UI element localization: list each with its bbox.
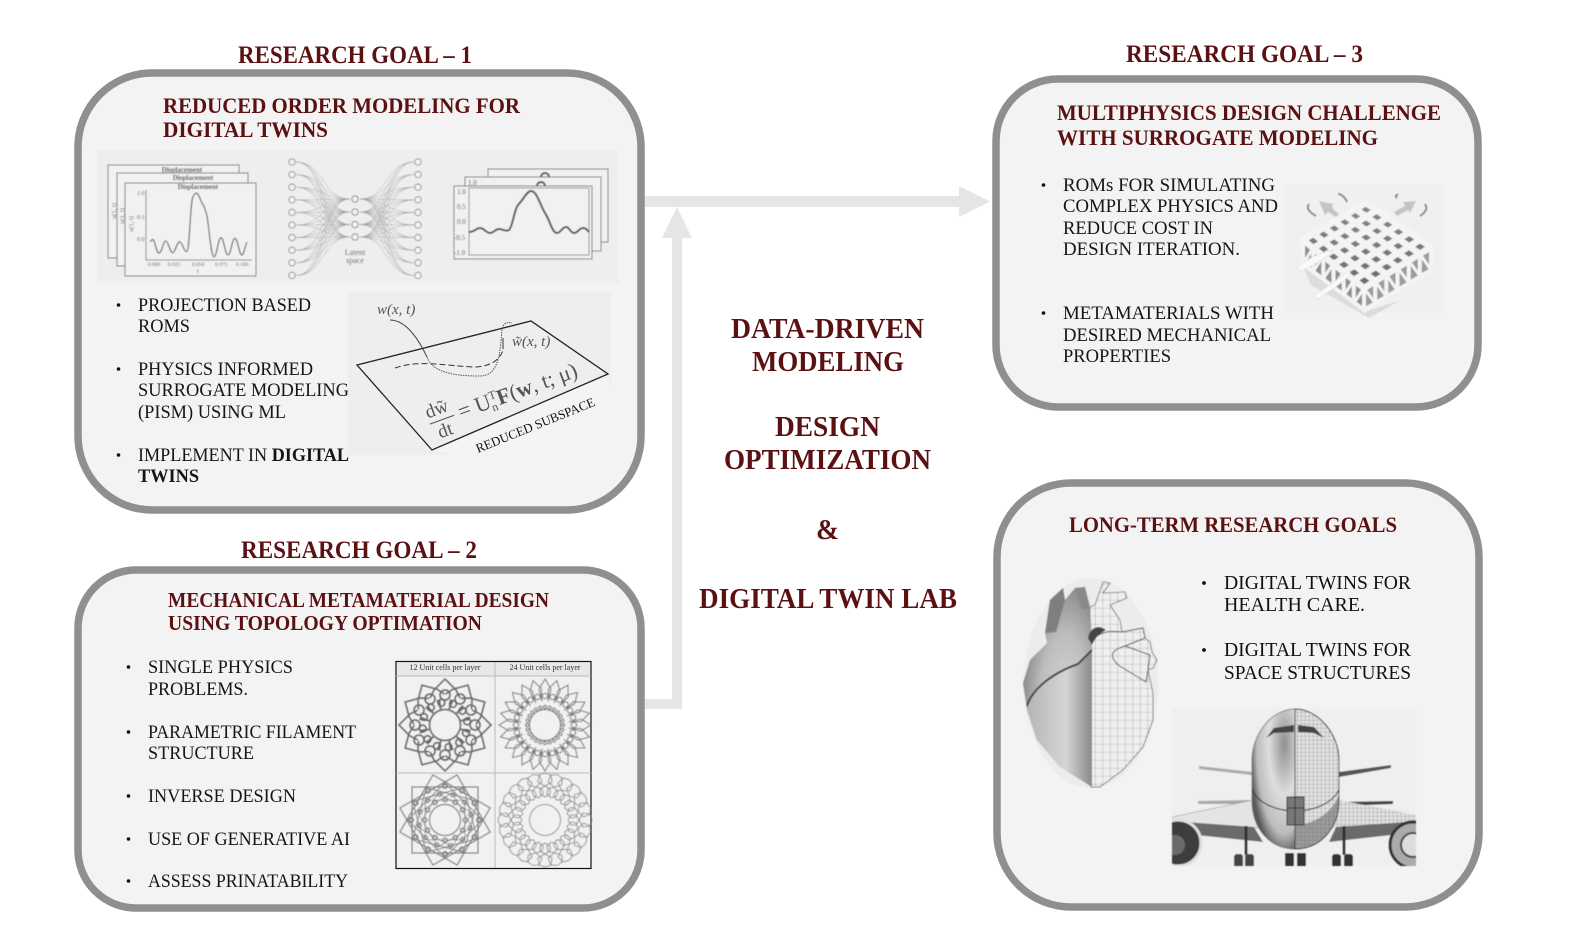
bullet list: goal 2: PARAMETRIC FILAMENT xyxy=(148,722,356,743)
bullet list: goal 1: PROJECTION BASED xyxy=(138,295,311,316)
bullet list: goal 3: COMPLEX PHYSICS AND xyxy=(1063,196,1278,217)
chart stack: reconstructed signals: 1.0 xyxy=(457,188,466,196)
chart stack: displacement plots: 1.0 xyxy=(137,191,144,197)
center text: themes: DIGITAL TWIN LAB xyxy=(699,584,957,615)
figure: autoencoder model reduction xyxy=(97,150,619,283)
diagram: neural network latent space: Latent xyxy=(345,248,366,257)
chart stack: reconstructed signals: -0.5 xyxy=(454,234,466,242)
figure: reduced subspace projection: w̃(x, t) xyxy=(512,334,550,350)
center text: themes: OPTIMIZATION xyxy=(724,445,931,476)
panel: research goal 2 xyxy=(78,570,641,908)
equation: dt xyxy=(435,418,457,443)
bullet list: goal 3: METAMATERIALS WITH xyxy=(1063,303,1274,324)
chart stack: displacement plots: 0.0 xyxy=(137,237,144,243)
figure: reduced subspace projection xyxy=(348,292,611,456)
chart stack: displacement plots: Displacement xyxy=(162,166,203,174)
panel 1 title: REDUCED ORDER MODELING FOR xyxy=(163,93,521,118)
arrows: load directions xyxy=(1297,194,1426,299)
bullet list: goal 3: PROPERTIES xyxy=(1063,346,1171,367)
heading: research goal 2: RESEARCH GOAL – 2 xyxy=(241,537,477,564)
heading: research goal 3: RESEARCH GOAL – 3 xyxy=(1126,41,1363,68)
bullet list: goal 2: STRUCTURE xyxy=(148,743,254,764)
chart stack: displacement plots: t xyxy=(197,268,199,275)
panel 1 title xyxy=(163,93,521,142)
chart stack: displacement plots: Displacement xyxy=(173,174,214,182)
rosette: 24 cells, type B xyxy=(487,762,603,878)
panel 2 title xyxy=(168,588,549,635)
rosette: 12 cells, type B xyxy=(400,775,490,865)
chart stack: reconstructed signals: 1.0 xyxy=(468,179,477,187)
bullet list: long-term goals: SPACE STRUCTURES xyxy=(1224,662,1411,684)
bullet list: goal 2: PROBLEMS. xyxy=(148,679,248,700)
chart stack: reconstructed signals: 0.0 xyxy=(457,218,466,226)
panel: research goal 3 xyxy=(996,79,1478,407)
center text: themes: DESIGN xyxy=(775,412,880,443)
bullet list: goal 1: ROMS xyxy=(138,316,190,337)
diagram: neural network latent space xyxy=(289,159,421,279)
chart stack: reconstructed signals: 0.5 xyxy=(457,203,466,211)
label: reduced subspace: REDUCED SUBSPACE xyxy=(474,394,597,456)
rosette: 12 cells, type A xyxy=(398,678,492,772)
center text: themes: & xyxy=(816,515,839,546)
equation: (w, t; μ) xyxy=(505,357,581,405)
panel 4 title: LONG-TERM RESEARCH GOALS xyxy=(1069,512,1397,537)
bullet list: goal 3: ROMs FOR SIMULATING xyxy=(1063,175,1275,196)
bullet list: goal 2: USE OF GENERATIVE AI xyxy=(148,829,350,850)
bullet list: goal 3 xyxy=(1042,175,1278,367)
panel 2 title: USING TOPOLOGY OPTIMATION xyxy=(168,611,482,635)
panel: research goal 1 xyxy=(78,73,641,510)
chart stack: displacement plots: 0.5 xyxy=(137,215,144,221)
bullet list: goal 1 xyxy=(117,295,349,487)
panel 3 title: WITH SURROGATE MODELING xyxy=(1057,125,1378,150)
bullet list: goal 2: INVERSE DESIGN xyxy=(148,786,296,807)
figure: heart digital twin xyxy=(1023,578,1158,788)
panel 2 title: MECHANICAL METAMATERIAL DESIGN xyxy=(168,588,549,612)
chart stack: reconstructed signals: -1.0 xyxy=(454,249,466,257)
rosette: 24 cells, type A xyxy=(489,669,601,781)
bullet list: goal 3: DESIGN ITERATION. xyxy=(1063,239,1240,260)
bullet list: long-term goals: DIGITAL TWINS FOR xyxy=(1224,572,1412,594)
chart stack: displacement plots: u(1, t) xyxy=(119,208,126,224)
panel 3 title xyxy=(1057,100,1441,150)
equation: T xyxy=(486,387,499,403)
equation: = U xyxy=(454,389,494,424)
figure: unit cell rosettes table xyxy=(396,662,603,878)
panel: long-term research goals xyxy=(997,483,1479,907)
center text: themes: DATA-DRIVEN xyxy=(731,314,924,345)
chart stack: displacement plots: 0.050 xyxy=(192,262,205,268)
figure: reduced subspace projection: w(x, t) xyxy=(377,302,415,318)
panel 1 title: DIGITAL TWINS xyxy=(163,117,328,142)
bullet list: goal 1: (PISM) USING ML xyxy=(138,402,286,423)
heading: research goal 1: RESEARCH GOAL – 1 xyxy=(238,42,472,69)
bullet list: goal 2: ASSESS PRINATABILITY xyxy=(148,871,348,892)
figure: metamaterial lattice xyxy=(1285,185,1445,318)
chart stack: reconstructed signals xyxy=(454,169,608,259)
bullet list: goal 2 xyxy=(127,657,356,892)
bullet list: goal 1: IMPLEMENT IN DIGITAL xyxy=(138,445,349,466)
chart stack: displacement plots: 0.000 xyxy=(148,262,161,268)
bullet list: goal 3: REDUCE COST IN xyxy=(1063,218,1213,239)
figure: unit cell rosettes table: 12 Unit cells per layer xyxy=(409,663,481,672)
chart stack: displacement plots: u(1, t) xyxy=(111,203,118,219)
bullet list: long-term goals: HEALTH CARE. xyxy=(1224,594,1365,616)
equation: n xyxy=(490,399,500,414)
chart stack: displacement plots: 0.025 xyxy=(168,262,181,268)
center text: themes: MODELING xyxy=(752,347,904,378)
chart stack: displacement plots: 0.075 xyxy=(215,262,228,268)
bullet list: goal 3: DESIRED MECHANICAL xyxy=(1063,325,1271,346)
center text: themes xyxy=(699,314,957,615)
chart stack: displacement plots xyxy=(108,165,256,276)
bullet list: long-term goals xyxy=(1202,572,1412,684)
equation: F xyxy=(493,382,514,410)
equation: dw̃ xyxy=(422,395,452,423)
chart stack: displacement plots: 0.100 xyxy=(236,262,249,268)
diagram: neural network latent space: space xyxy=(346,256,364,265)
arrow: goal 1 to goal 3 xyxy=(640,186,990,217)
figure: unit cell rosettes table: 24 Unit cells per layer xyxy=(509,663,581,672)
bullet list: goal 1: TWINS xyxy=(138,466,199,487)
bullet list: goal 2: SINGLE PHYSICS xyxy=(148,657,293,678)
panel 3 title: MULTIPHYSICS DESIGN CHALLENGE xyxy=(1057,100,1441,125)
chart stack: displacement plots: Displacement xyxy=(178,183,219,191)
bullet list: goal 1: PHYSICS INFORMED xyxy=(138,359,313,380)
chart stack: displacement plots: u(1, t) xyxy=(128,216,135,232)
figure: airplane digital twin xyxy=(1171,708,1417,867)
arrow: goal 2 up to goal 3 connector xyxy=(640,207,692,709)
bullet list: goal 1: SURROGATE MODELING xyxy=(138,380,349,401)
bullet list: long-term goals: DIGITAL TWINS FOR xyxy=(1224,639,1412,661)
equation xyxy=(422,350,585,445)
